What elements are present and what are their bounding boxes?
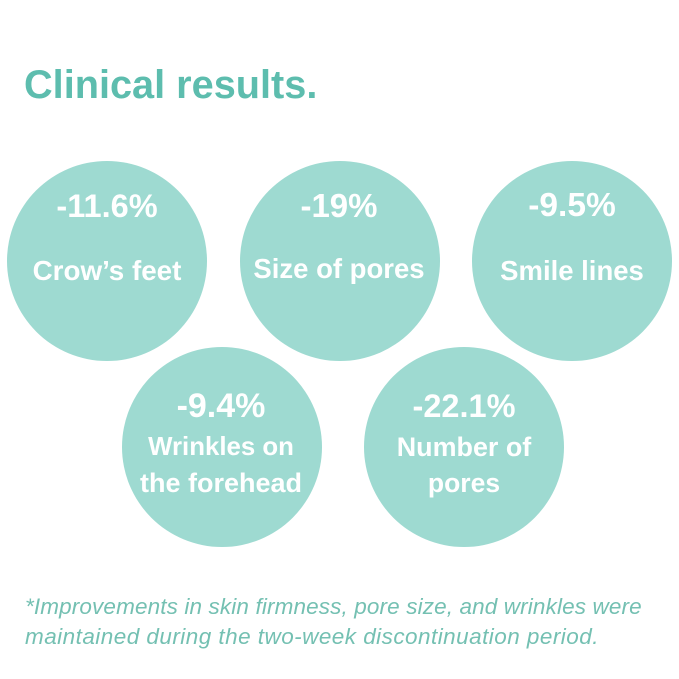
label	[140, 433, 302, 498]
circle: number of pores	[364, 347, 564, 547]
label: the forehead	[140, 468, 302, 498]
label	[397, 432, 532, 498]
label: Smile lines	[500, 255, 644, 286]
label: Wrinkles on	[148, 433, 294, 461]
footnote	[25, 594, 642, 649]
label: Size of pores	[253, 253, 425, 284]
label: pores	[428, 468, 500, 498]
label: Number of	[397, 432, 531, 462]
title: Clinical results.	[24, 63, 317, 107]
value: -9.4%	[177, 387, 265, 425]
footnote: maintained during the two-week discontinuation period.	[25, 624, 599, 649]
label: Crow’s feet	[33, 255, 181, 286]
circle: crow's feet	[7, 161, 207, 361]
circle: smile lines	[472, 161, 672, 361]
value: -19%	[300, 187, 378, 224]
value: -9.5%	[528, 187, 616, 224]
value: -22.1%	[412, 388, 515, 424]
circle: size of pores	[240, 161, 440, 361]
value: -11.6%	[56, 188, 158, 224]
circle: wrinkles on the forehead	[122, 347, 322, 547]
footnote: *Improvements in skin firmness, pore size, and wrinkles were	[25, 594, 642, 619]
